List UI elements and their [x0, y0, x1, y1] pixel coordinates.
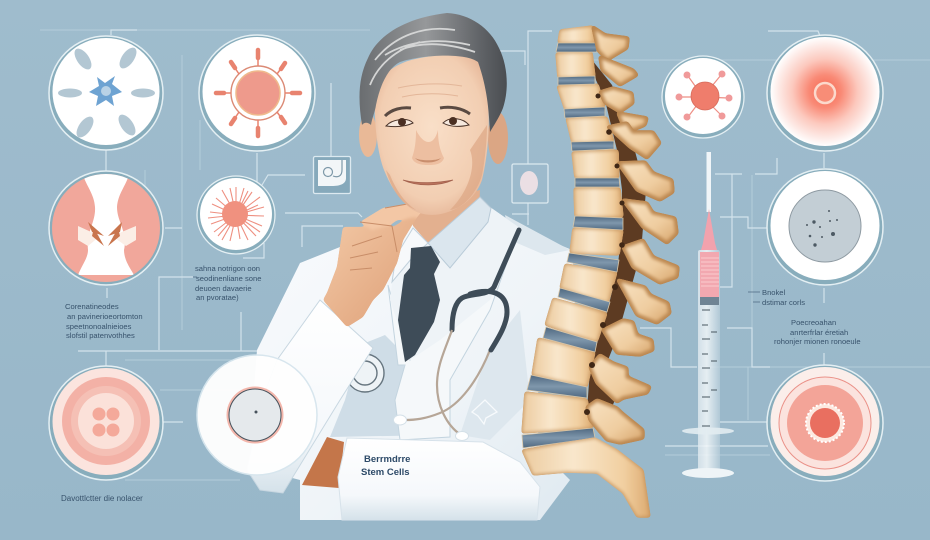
tie	[398, 246, 440, 362]
text: sleeve label	[361, 454, 410, 478]
foramen holes	[584, 94, 625, 415]
nostril shadow	[415, 158, 441, 162]
finger flange	[682, 428, 734, 434]
text: upper centre annotation: seodinenliane sone	[196, 274, 261, 283]
intervertebral discs	[522, 43, 623, 448]
syringe	[682, 152, 734, 478]
sacrum	[522, 438, 650, 517]
circle: tissue cross-section	[49, 366, 163, 480]
circle: cell with receptors	[199, 35, 315, 151]
coat shading	[330, 335, 440, 437]
text: left annotation: speetnonoalnieioes	[66, 322, 132, 331]
chest piece	[346, 354, 384, 392]
text: syringe label	[762, 288, 805, 307]
text: upper centre annotation: an pvoratae)	[196, 293, 239, 302]
eyes	[386, 117, 469, 127]
lapel emblem	[472, 400, 497, 424]
circle: pink tissue ring	[767, 365, 883, 481]
neck	[410, 190, 480, 244]
text: right annotation	[774, 318, 861, 346]
text: left annotation: an pavinerioeortomton	[67, 312, 143, 321]
needle	[706, 152, 711, 212]
text: syringe label: Bnokel	[762, 288, 786, 297]
lower sleeve	[338, 438, 540, 520]
needle hub	[701, 209, 717, 250]
circle: grey culture dish	[767, 169, 883, 285]
vertebral bodies	[522, 26, 623, 433]
eyebrows	[385, 107, 470, 116]
circle: small cell with receptors	[662, 56, 744, 138]
icon: box with tube	[314, 156, 350, 194]
text: right annotation: Poecreoahan	[791, 318, 836, 327]
circle: red-stained cell	[767, 35, 883, 151]
text: upper centre annotation: deuoen davaerie	[195, 284, 252, 293]
forehead wrinkles	[398, 84, 462, 97]
circle: stem cell with six petals	[49, 36, 163, 150]
spine	[522, 26, 678, 517]
stethoscope	[394, 230, 519, 440]
hair highlights	[370, 29, 475, 85]
text: bottom-left caption: Davottlctter die nolacer	[61, 494, 143, 503]
text: sleeve label: Berrmdrre	[364, 454, 410, 465]
text: left annotation	[65, 302, 143, 340]
nose	[412, 130, 444, 165]
mouth	[403, 180, 453, 185]
doctor figure	[247, 13, 576, 520]
forearm below sleeve	[302, 437, 344, 488]
graduations	[702, 310, 717, 426]
text: right annotation: rohonjer mionen ronoeule	[774, 337, 861, 346]
circle: kidney cross-section	[49, 170, 163, 286]
spinal canal shadow	[587, 60, 646, 425]
ears	[359, 113, 377, 157]
face	[375, 55, 489, 215]
spinous processes	[587, 27, 678, 443]
text: upper centre annotation: sahna notrigon oon	[195, 264, 260, 273]
cheek and jaw shading	[386, 125, 487, 210]
text: left annotation: slofstil patenvothhes	[66, 331, 135, 340]
upper sleeve	[247, 300, 373, 493]
text: upper centre annotation	[195, 264, 261, 302]
text: syringe label: dstimar corls	[762, 298, 805, 307]
barrel	[698, 250, 720, 472]
circle: radiating cell	[197, 176, 275, 254]
hand	[323, 203, 423, 327]
shirt and collar	[390, 208, 520, 360]
connector lines	[40, 30, 930, 480]
finger creases	[350, 203, 413, 270]
hair	[360, 13, 507, 132]
text: left annotation: Corenatineodes	[65, 302, 119, 311]
icon: box with cell	[512, 164, 548, 203]
pink liquid	[700, 252, 719, 297]
plunger seal	[700, 297, 719, 305]
text: sleeve label: Stem Cells	[361, 467, 410, 478]
circle: sample dish over sleeve	[197, 355, 317, 475]
text: right annotation: anrterfrlar éretiah	[790, 328, 848, 337]
lapels	[388, 240, 515, 440]
lab coat	[250, 207, 576, 520]
plunger base	[682, 468, 734, 478]
